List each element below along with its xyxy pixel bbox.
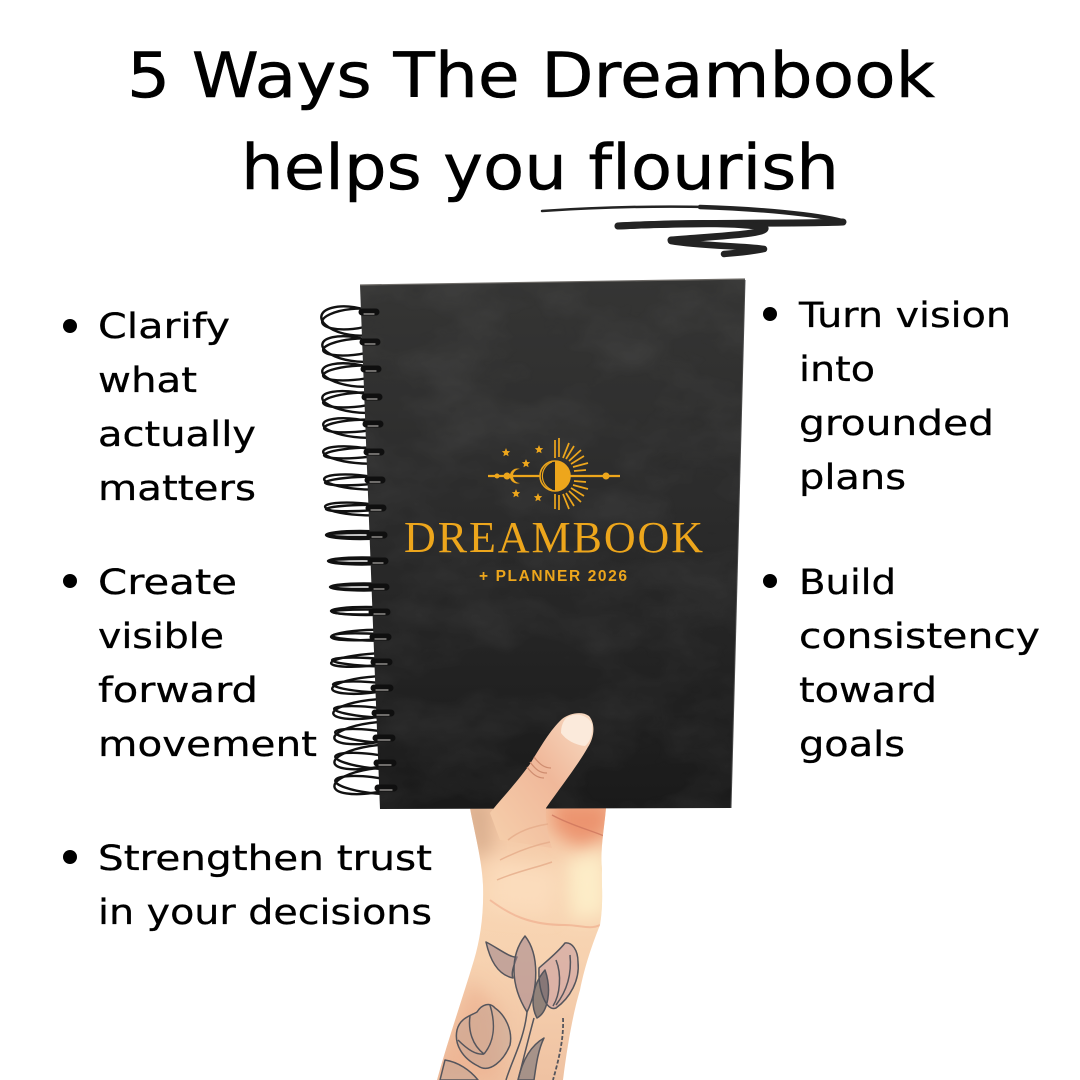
bullet: turn vision into grounded plans: into <box>799 350 875 390</box>
bullet: clarify what actually matters: matters <box>98 469 256 509</box>
bullet: build consistency toward goals: toward <box>799 671 937 711</box>
title: helps you flourish <box>241 131 839 204</box>
spiral binding <box>319 302 409 799</box>
title: 5 Ways The Dreambook <box>127 39 935 112</box>
bullet: create visible forward movement: movement <box>98 725 317 765</box>
bullet: create visible forward movement: Create <box>98 563 237 603</box>
bullet: build consistency toward goals: consistency <box>799 617 1040 657</box>
bullet: build consistency toward goals: Build <box>799 563 896 603</box>
bullet: clarify what actually matters: actually <box>98 415 256 455</box>
bullet: strengthen trust in your decisions <box>63 839 432 933</box>
bullet: turn vision into grounded plans: grounded <box>799 404 994 444</box>
bullet: strengthen trust in your decisions: in your decisions <box>98 893 432 933</box>
bullet: turn vision into grounded plans <box>763 296 1011 498</box>
bullet: build consistency toward goals: goals <box>799 725 905 765</box>
notebook cover <box>355 275 750 815</box>
bullet: build consistency toward goals <box>763 563 1040 765</box>
bullet: clarify what actually matters: what <box>98 361 197 401</box>
cover title: DREAMBOOK <box>404 513 703 562</box>
hand and wrist with tattoo <box>430 800 612 1080</box>
bullet: turn vision into grounded plans: plans <box>799 458 906 498</box>
cover subtitle: + PLANNER 2026 <box>479 568 627 585</box>
bullet: clarify what actually matters: Clarify <box>98 307 230 347</box>
bullet: create visible forward movement: visible <box>98 617 224 657</box>
bullet: strengthen trust in your decisions: Strengthen trust <box>98 839 432 879</box>
bullet: clarify what actually matters <box>63 307 256 509</box>
bullet: create visible forward movement <box>63 563 317 765</box>
bullet: create visible forward movement: forward <box>98 671 258 711</box>
spiral holes and wires on cover <box>362 312 394 790</box>
bullet: turn vision into grounded plans: Turn vision <box>798 296 1011 336</box>
tattoo: tulips and leaves <box>440 936 578 1080</box>
title <box>127 39 935 204</box>
thumb over cover <box>490 713 593 880</box>
scribble underline <box>542 207 843 254</box>
gold sun and moon emblem <box>488 438 620 510</box>
